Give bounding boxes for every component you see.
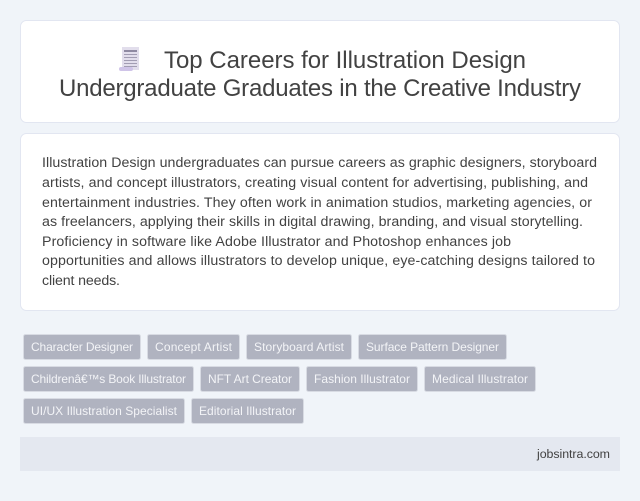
description text: artists, and concept illustrators, creating visual content for advertising, publishing, and — [42, 175, 588, 191]
tag: Storyboard Artist: Storyboard Artist — [254, 340, 345, 354]
tag: UI/UX Illustration Specialist: UI/UX Illustration Specialist — [31, 404, 178, 418]
title line 2: Undergraduate Graduates in the Creative Industry — [59, 75, 581, 102]
description text: as freelancers, applying their skills in digital drawing, branding, and visual storytelling. — [42, 214, 583, 230]
tag: Medical Illustrator: Medical Illustrator — [432, 372, 528, 386]
tag: Concept Artist: Concept Artist — [155, 340, 233, 354]
tag: Fashion Illustrator — [306, 366, 418, 392]
footer bar — [20, 437, 620, 471]
tag: Surface Pattern Designer — [358, 334, 506, 360]
description text: client needs. — [42, 273, 120, 289]
panel: description — [20, 134, 620, 310]
description text: Proficiency in software like Adobe Illustrator and Photoshop enhances job — [42, 234, 511, 250]
panel: title card — [20, 20, 620, 122]
tag: Character Designer — [24, 334, 140, 360]
tag: Medical Illustrator — [424, 366, 536, 392]
tag: UI/UX Illustration Specialist — [24, 398, 184, 424]
tag: Editorial Illustrator — [192, 398, 304, 424]
description text: entertainment industries. They often work in animation studios, marketing agencies, or — [42, 195, 592, 211]
description text: Illustration Design undergraduates can pursue careers as graphic designers, storyboard — [42, 155, 597, 171]
tag: NFT Art Creator — [200, 366, 300, 392]
description text — [42, 155, 597, 289]
tag: Surface Pattern Designer: Surface Pattern Designer — [366, 340, 499, 354]
tag: Concept Artist — [148, 334, 240, 360]
tag: Character Designer: Character Designer — [31, 340, 133, 354]
description text: opportunities and allows illustrators to develop unique, eye-catching designs tailored to — [42, 253, 595, 269]
tag: NFT Art Creator: NFT Art Creator — [208, 372, 292, 386]
tag: Children's Book Illustrator — [24, 366, 194, 392]
tag: Fashion Illustrator: Fashion Illustrator — [314, 372, 410, 386]
icon: document scroll — [119, 47, 139, 71]
footer source label: jobsintra.com — [536, 447, 610, 461]
tag: Children's Book Illustrator: Childrenâ€™s Book Illustrator — [31, 372, 186, 386]
title line 1: Top Careers for Illustration Design — [164, 47, 526, 74]
tag: Storyboard Artist — [246, 334, 352, 360]
tag: Editorial Illustrator: Editorial Illustrator — [199, 404, 296, 418]
